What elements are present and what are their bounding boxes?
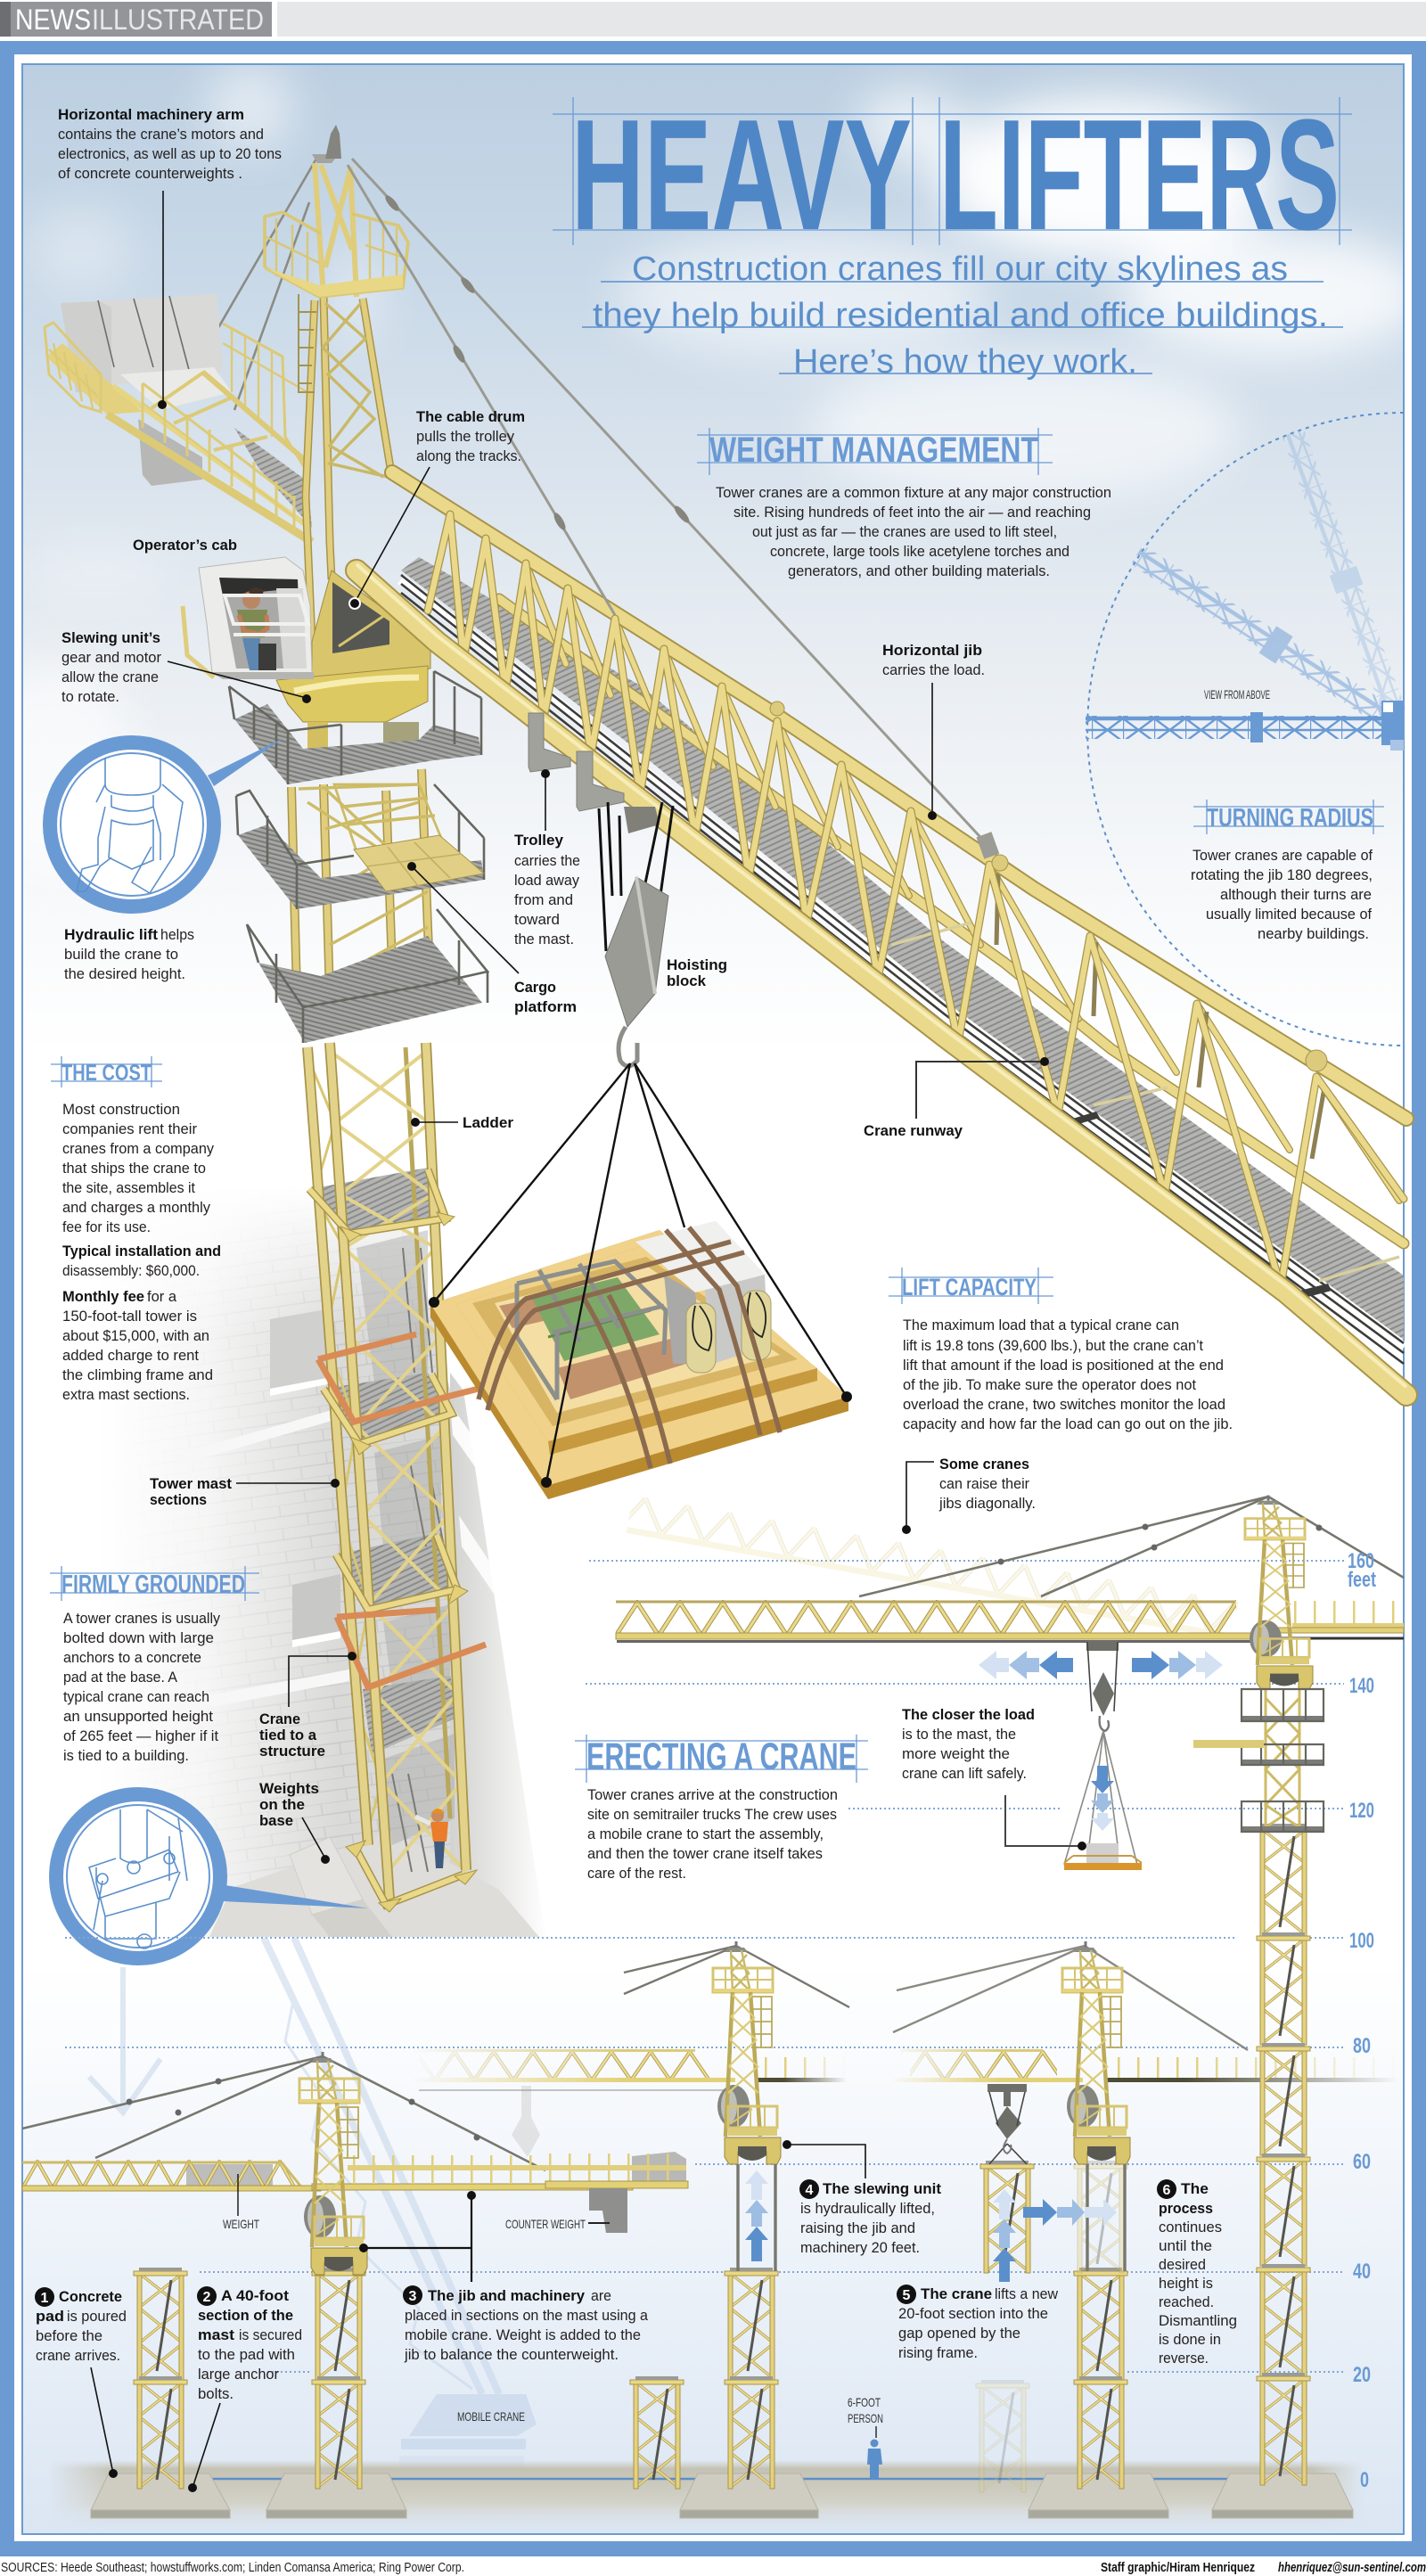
height scale labels: 60 xyxy=(1353,2150,1371,2174)
section: erecting a crane: and then the tower crane itself takes xyxy=(587,1846,823,1862)
load near mast diagram xyxy=(1064,1640,1142,1870)
section: lift capacity: LIFT CAPACITY xyxy=(902,1274,1037,1300)
label: slewing unit: Slewing unit’s xyxy=(61,630,160,646)
label: the closer the load: is to the mast, the xyxy=(902,1727,1016,1743)
section: the cost: for a xyxy=(147,1289,177,1305)
height scale labels: 40 xyxy=(1353,2260,1371,2284)
section: lift capacity: overload the crane, two switches monitor the load xyxy=(903,1397,1225,1413)
step 4: The slewing unit xyxy=(823,2181,942,2197)
step 5 crane xyxy=(882,1941,1399,2489)
label: horizontal machinery arm: Horizontal machinery arm xyxy=(58,107,244,123)
subtitle: Here’s how they work. xyxy=(793,343,1137,381)
label: hoisting block xyxy=(667,957,727,989)
label: hydraulic lift: build the crane to xyxy=(64,947,178,963)
section: the cost: companies rent their xyxy=(62,1121,198,1137)
label: slewing unit: gear and motor xyxy=(61,650,161,666)
front web xyxy=(428,514,1404,1286)
section: turning radius: nearby buildings. xyxy=(1258,926,1369,942)
label: ladder: Ladder xyxy=(463,1115,514,1131)
section: firmly grounded: FIRMLY GROUNDED xyxy=(61,1571,245,1599)
counterweight blocks xyxy=(61,294,232,486)
label: operator's cab: Operator’s cab xyxy=(133,537,237,554)
step 3: The jib and machinery xyxy=(428,2288,586,2304)
tower head mast xyxy=(265,125,408,642)
label: mobile crane: MOBILE CRANE xyxy=(457,2409,525,2424)
step 2: large anchor xyxy=(198,2367,279,2383)
title xyxy=(553,86,1352,263)
sling cables xyxy=(429,1063,852,1488)
label: cargo platform: Cargo xyxy=(514,980,556,996)
step 5: 20-foot section into the xyxy=(898,2306,1048,2322)
step 6: reverse. xyxy=(1159,2350,1209,2367)
step 6: until the xyxy=(1159,2238,1212,2254)
section: erecting a crane: Tower cranes arrive at the construction xyxy=(587,1787,838,1803)
step 5 xyxy=(897,2285,1058,2361)
label: 6-foot person: 6-FOOT xyxy=(848,2395,881,2409)
jib travel arrows xyxy=(979,1651,1223,1831)
mast collars xyxy=(309,1169,477,1912)
building behind tower xyxy=(98,1185,553,1937)
turning radius arc and top-view jibs xyxy=(1086,413,1408,1046)
label: the closer the load: crane can lift safely. xyxy=(902,1766,1027,1782)
hub slewing assembly xyxy=(276,570,430,762)
section: weight management: WEIGHT MANAGEMENT xyxy=(709,431,1038,470)
label: hydraulic lift: Hydraulic lift xyxy=(64,927,159,943)
section: the cost: THE COST xyxy=(61,1061,152,1086)
section: weight management: out just as far — the cranes are used to lift steel, xyxy=(752,524,1057,540)
step 2 xyxy=(188,2286,302,2492)
step 6: Dismantling xyxy=(1159,2313,1237,2329)
label: hydraulic lift xyxy=(64,927,194,982)
label: crane runway xyxy=(864,1057,1049,1139)
faint hoist ghost xyxy=(512,2086,540,2157)
section: weight management: Tower cranes are a common fixture at any major construction xyxy=(716,485,1111,501)
step 5: The crane xyxy=(921,2286,992,2302)
ground plane and pads xyxy=(57,2462,1356,2521)
second platform xyxy=(236,784,484,909)
ghost raised jib xyxy=(626,1495,1238,1640)
step 6 xyxy=(1157,2179,1237,2367)
step 2: mast xyxy=(198,2327,235,2343)
step 5: 5 xyxy=(903,2288,911,2303)
label: horizontal machinery arm: contains the crane’s motors and xyxy=(58,127,264,143)
height scale labels: 140 xyxy=(1349,1674,1374,1698)
step 1: 1 xyxy=(41,2291,49,2306)
header bar: NEWS xyxy=(15,4,91,36)
label: the closer the load: The closer the load xyxy=(902,1707,1035,1723)
step 2: A 40-foot xyxy=(221,2288,290,2304)
section: the cost: added charge to rent xyxy=(62,1348,199,1364)
section: erecting a crane: care of the rest. xyxy=(587,1866,686,1882)
label: cable drum: The cable drum xyxy=(416,409,525,425)
label: trolley: the mast. xyxy=(514,931,574,948)
section: erecting a crane xyxy=(575,1735,868,1882)
label: cable drum: along the tracks. xyxy=(416,448,521,464)
label: tower mast sections xyxy=(150,1476,340,1508)
step 2: is secured xyxy=(239,2327,302,2343)
worker xyxy=(415,1809,448,1868)
label: horizontal machinery arm xyxy=(58,107,282,409)
height scale dotted lines xyxy=(65,1561,1344,2372)
step 4 xyxy=(783,2140,942,2256)
label: tower mast sections: sections xyxy=(150,1492,207,1508)
subtitle: Construction cranes fill our city skylines as xyxy=(632,250,1288,288)
section: the cost: extra mast sections. xyxy=(62,1387,190,1403)
crane runway rails xyxy=(401,575,1404,1364)
label: trolley: from and xyxy=(514,892,573,908)
label: ladder xyxy=(411,1115,514,1131)
section: the cost: fee for its use. xyxy=(62,1219,151,1235)
label: counter weight: COUNTER WEIGHT xyxy=(505,2217,586,2231)
step 6: is done in xyxy=(1159,2332,1221,2348)
ghost section on ground step 5 xyxy=(976,2380,1029,2492)
lattice diagonals xyxy=(309,1052,466,1872)
height scale labels: 80 xyxy=(1353,2034,1371,2058)
platforms on climbing frame xyxy=(229,671,488,1043)
third platform xyxy=(247,909,488,1043)
top chord xyxy=(392,472,1406,1119)
step 5: lifts a new xyxy=(995,2286,1058,2302)
section: firmly grounded: pad at the base. A xyxy=(63,1669,177,1686)
section: the cost: disassembly: $60,000. xyxy=(62,1263,200,1279)
label: some cranes: jibs diagonally. xyxy=(938,1496,1036,1512)
operator's cab xyxy=(183,557,314,679)
label: weights on the base: base xyxy=(259,1813,293,1829)
step 1-2 mast xyxy=(134,2268,187,2489)
height scale labels xyxy=(1348,1549,1376,2492)
header bar: ILLUSTRATED xyxy=(92,4,264,36)
step 6: process xyxy=(1159,2201,1213,2217)
subtitle xyxy=(582,250,1343,381)
label: hydraulic lift: the desired height. xyxy=(64,966,185,982)
section: firmly grounded xyxy=(50,1566,259,1764)
upper platform xyxy=(229,671,481,784)
step 6: desired xyxy=(1159,2257,1206,2273)
label: crane tied to a structure: Crane xyxy=(259,1711,300,1727)
label: some cranes: Some cranes xyxy=(939,1456,1029,1473)
label: hoisting block: block xyxy=(667,973,707,989)
label: tower mast sections: Tower mast xyxy=(150,1476,233,1492)
section: firmly grounded: anchors to a concrete xyxy=(63,1650,201,1666)
section: the cost xyxy=(51,1056,221,1403)
section: lift capacity: capacity and how far the load can go out on the jib. xyxy=(903,1416,1233,1432)
section: erecting a crane: site on semitrailer trucks The crew uses xyxy=(587,1807,837,1823)
label: slewing unit xyxy=(61,630,311,705)
label: 6-foot person: PERSON xyxy=(848,2411,883,2425)
label: 6-foot person xyxy=(848,2395,883,2438)
section: turning radius xyxy=(1191,800,1384,942)
section: the cost: that ships the crane to xyxy=(62,1161,206,1177)
step 3: jib to balance the counterweight. xyxy=(404,2347,619,2363)
label: weights on the base: Weights xyxy=(259,1781,319,1797)
footer credits: Staff graphic/Hiram Henriquez xyxy=(1101,2560,1255,2575)
label: the closer the load: more weight the xyxy=(902,1746,1010,1762)
step 4: raising the jib and xyxy=(800,2220,915,2236)
section: turning radius: TURNING RADIUS xyxy=(1207,804,1373,833)
label: cargo platform: platform xyxy=(514,999,577,1015)
main horizontal jib xyxy=(276,472,1406,1395)
label: some cranes: can raise their xyxy=(939,1476,1029,1492)
section: lift capacity: lift is 19.8 tons (39,600 lbs.), but the crane can’t xyxy=(903,1338,1203,1354)
label: slewing unit: allow the crane xyxy=(61,669,159,685)
label: weights on the base xyxy=(259,1781,330,1864)
label: trolley: toward xyxy=(514,912,560,928)
section: firmly grounded: typical crane can reach xyxy=(63,1689,209,1705)
climbing frame members xyxy=(291,769,441,996)
section: turning radius: usually limited because of xyxy=(1206,907,1372,923)
height scale labels: 100 xyxy=(1349,1929,1374,1953)
base detail circle xyxy=(56,1794,368,1958)
lifted section and block xyxy=(980,2084,1034,2273)
label: hydraulic lift: helps xyxy=(160,927,194,943)
section: turning radius: rotating the jib 180 degrees, xyxy=(1191,867,1373,883)
step 2: bolts. xyxy=(198,2386,234,2402)
subtitle: they help build residential and office buildings. xyxy=(593,297,1328,334)
step 1: Concrete xyxy=(59,2289,122,2305)
label: cable drum: pulls the trolley xyxy=(416,429,515,445)
step 3 crane xyxy=(22,2052,688,2489)
section: turning radius: although their turns are xyxy=(1220,887,1372,903)
tall crane platforms xyxy=(1193,1689,1324,1832)
section: weight management xyxy=(697,428,1111,579)
step 1: pad xyxy=(36,2309,64,2325)
step 2: section of the xyxy=(198,2308,293,2324)
step 4: machinery 20 feet. xyxy=(800,2240,920,2256)
step 6: The xyxy=(1181,2181,1209,2197)
label: the closer the load xyxy=(902,1707,1086,1850)
footer credits: SOURCES: Heede Southeast; howstuffworks.com; Linden Comansa America; Ring Power Corp. xyxy=(1,2560,464,2575)
label: trolley xyxy=(514,769,580,948)
tower mast with ties xyxy=(307,1043,486,1912)
step 5: gap opened by the xyxy=(898,2326,1020,2342)
label: horizontal jib xyxy=(882,643,985,820)
section: the cost: the site, assembles it xyxy=(62,1180,195,1196)
section: firmly grounded: bolted down with large xyxy=(63,1630,214,1646)
label: trolley: carries the xyxy=(514,853,580,869)
label: crane tied to a structure: tied to a xyxy=(259,1727,317,1743)
step 6: 6 xyxy=(1163,2183,1171,2198)
section: lift capacity: The maximum load that a typical crane can xyxy=(903,1317,1179,1333)
step 1: crane arrives. xyxy=(36,2348,120,2364)
support cables xyxy=(348,159,999,859)
tall crane on right xyxy=(616,1495,1404,2485)
orange ties to structure xyxy=(318,1334,486,1687)
label: some cranes xyxy=(902,1456,1036,1534)
height scale labels: feet xyxy=(1348,1568,1376,1592)
label: cable drum xyxy=(348,409,525,610)
section: turning radius: Tower cranes are capable of xyxy=(1192,848,1373,864)
label: crane tied to a structure: structure xyxy=(259,1743,325,1760)
section: firmly grounded: an unsupported height xyxy=(63,1709,213,1725)
step 6: continues xyxy=(1159,2219,1222,2236)
section: the cost: Typical installation and xyxy=(62,1243,221,1259)
step 1: is poured xyxy=(67,2309,127,2325)
step 1: before the xyxy=(36,2328,102,2344)
step 5: rising frame. xyxy=(898,2345,978,2361)
label: weight: WEIGHT xyxy=(223,2217,259,2231)
step 6: height is xyxy=(1159,2276,1213,2292)
label: hoisting block: Hoisting xyxy=(667,957,727,973)
straps xyxy=(479,1227,780,1468)
step 4 crane xyxy=(401,1941,856,2489)
tall crane jib xyxy=(616,1600,1404,1643)
section: weight management: site. Rising hundreds of feet into the air — and reaching xyxy=(733,505,1091,521)
step 4: is hydraulically lifted, xyxy=(800,2201,935,2217)
section: erecting a crane: a mobile crane to start the assembly, xyxy=(587,1826,824,1842)
section: firmly grounded: is tied to a building. xyxy=(63,1748,189,1764)
lower chord xyxy=(356,570,1406,1395)
section: firmly grounded: A tower cranes is usually xyxy=(63,1611,221,1627)
lifting arrows for steps 4 and 5 xyxy=(745,2170,1117,2282)
section: the cost: 150-foot-tall tower is xyxy=(62,1309,197,1325)
section: the cost: Most construction xyxy=(62,1102,180,1118)
label: cargo platform xyxy=(407,862,577,1015)
step 3 lone mast section xyxy=(630,2376,684,2489)
step 2: 2 xyxy=(203,2290,211,2305)
label: crane runway: Crane runway xyxy=(864,1123,963,1139)
label: horizontal machinery arm: of concrete counterweights . xyxy=(58,166,242,182)
height scale labels: 0 xyxy=(1360,2468,1369,2492)
cargo platform xyxy=(354,835,484,891)
step 3: are xyxy=(591,2288,611,2304)
section: weight management: generators, and other building materials. xyxy=(788,563,1050,579)
footer credits xyxy=(1,2560,1426,2575)
step 3 xyxy=(359,2191,649,2363)
step 3: 3 xyxy=(409,2289,417,2304)
section: the cost: and charges a monthly xyxy=(62,1200,211,1216)
section: firmly grounded: of 265 feet — higher if it xyxy=(63,1728,218,1744)
step 6: reached. xyxy=(1159,2294,1214,2310)
counter jib deck and railings xyxy=(45,323,312,542)
label: view from above: VIEW FROM ABOVE xyxy=(1204,687,1270,701)
label: slewing unit: to rotate. xyxy=(61,689,119,705)
title: HEAVY xyxy=(571,86,912,263)
trolley and hoisting block xyxy=(529,713,673,1066)
section: the cost: Monthly fee xyxy=(62,1289,144,1305)
label: horizontal machinery arm: electronics, as well as up to 20 tons xyxy=(58,146,282,162)
step 4: 4 xyxy=(806,2183,814,2198)
label: weight xyxy=(223,2174,259,2231)
section: the cost: about $15,000, with an xyxy=(62,1328,209,1344)
section: the cost: the climbing frame and xyxy=(62,1367,213,1383)
label: crane tied to a structure xyxy=(259,1652,356,1760)
label: horizontal jib: Horizontal jib xyxy=(882,643,982,659)
section: lift capacity xyxy=(889,1267,1233,1432)
counter jib and tower head xyxy=(45,125,408,642)
section: lift capacity: lift that amount if the load is positioned at the end xyxy=(903,1358,1224,1374)
hydraulic lift detail circle xyxy=(50,738,283,907)
step 1 xyxy=(35,2287,127,2478)
mobile crane ghost xyxy=(89,1938,537,2473)
step 3: placed in sections on the mast using a xyxy=(405,2308,649,2324)
height scale labels: 120 xyxy=(1349,1799,1374,1823)
label: weights on the base: on the xyxy=(259,1797,305,1813)
section: lift capacity: of the jib. To make sure the operator does not xyxy=(903,1377,1196,1393)
label: horizontal jib: carries the load. xyxy=(882,662,985,678)
section: erecting a crane: ERECTING A CRANE xyxy=(586,1735,856,1778)
header bar xyxy=(0,2,1426,37)
walkway grate xyxy=(401,557,1404,1340)
label: trolley: load away xyxy=(514,873,580,889)
label: trolley: Trolley xyxy=(514,833,564,849)
height scale labels: 160 xyxy=(1348,1549,1374,1573)
section: weight management: concrete, large tools like acetylene torches and xyxy=(770,544,1070,560)
step 3: mobile crane. Weight is added to the xyxy=(405,2327,641,2343)
section: the cost: cranes from a company xyxy=(62,1141,215,1157)
6-foot person icon xyxy=(867,2439,882,2479)
step 2: to the pad with xyxy=(198,2347,295,2363)
height scale labels: 20 xyxy=(1353,2363,1371,2387)
load on pallet xyxy=(429,1063,852,1499)
